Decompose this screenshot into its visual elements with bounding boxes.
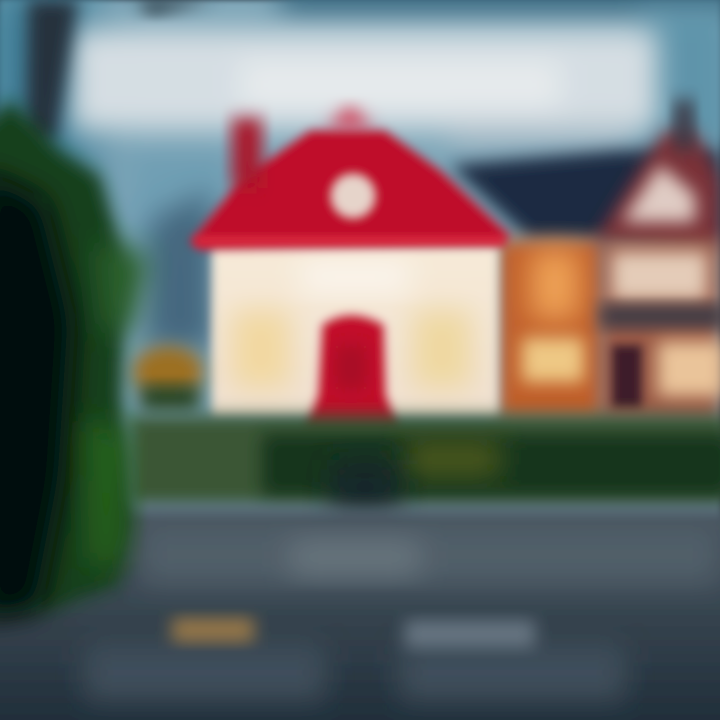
sky background xyxy=(0,0,720,520)
distant hill at left of house xyxy=(145,190,215,350)
red roof xyxy=(190,105,510,250)
red door xyxy=(304,315,400,430)
tree trunk top left xyxy=(26,0,78,140)
large hedge left foreground xyxy=(0,100,150,620)
right wall xyxy=(600,240,720,420)
main house wall xyxy=(212,246,498,416)
lawn and hedge xyxy=(130,415,720,515)
road xyxy=(0,508,720,720)
house right xyxy=(498,100,720,420)
round attic window xyxy=(331,174,375,218)
white clouds xyxy=(72,30,657,147)
distant bush orange xyxy=(132,346,204,398)
dark roof behind xyxy=(450,150,720,240)
right gable xyxy=(595,130,720,250)
orange wing xyxy=(498,240,603,418)
